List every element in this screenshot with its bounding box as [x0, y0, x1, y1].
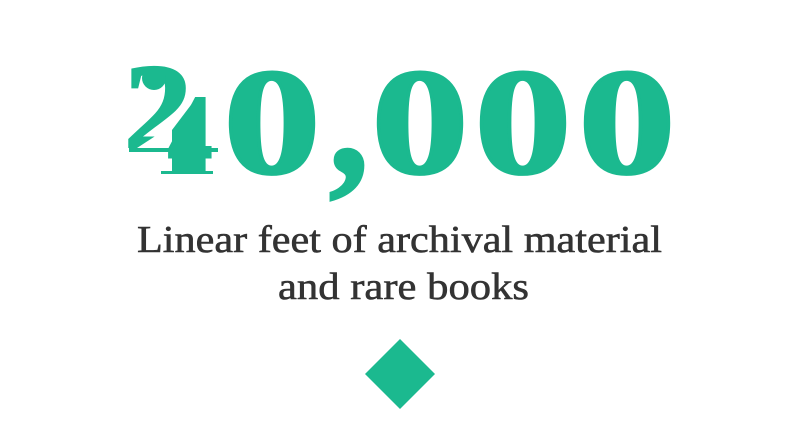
caption text — [137, 219, 662, 308]
big number: 40,000: 0 — [474, 37, 572, 206]
big number: 40,000: 4 — [167, 73, 213, 198]
big number: 40,000 — [122, 22, 676, 212]
caption text: and rare books — [278, 266, 529, 308]
caption text: Linear feet of archival material — [137, 219, 662, 261]
big number: 40,000: 0 — [578, 37, 676, 206]
icon: diamond — [365, 339, 435, 409]
big number: 40,000: 0 — [223, 37, 321, 206]
big number: 40,000: 0 — [371, 37, 469, 206]
big number: 40,000: , — [328, 22, 370, 212]
big number: 40,000: 2 — [123, 38, 193, 180]
